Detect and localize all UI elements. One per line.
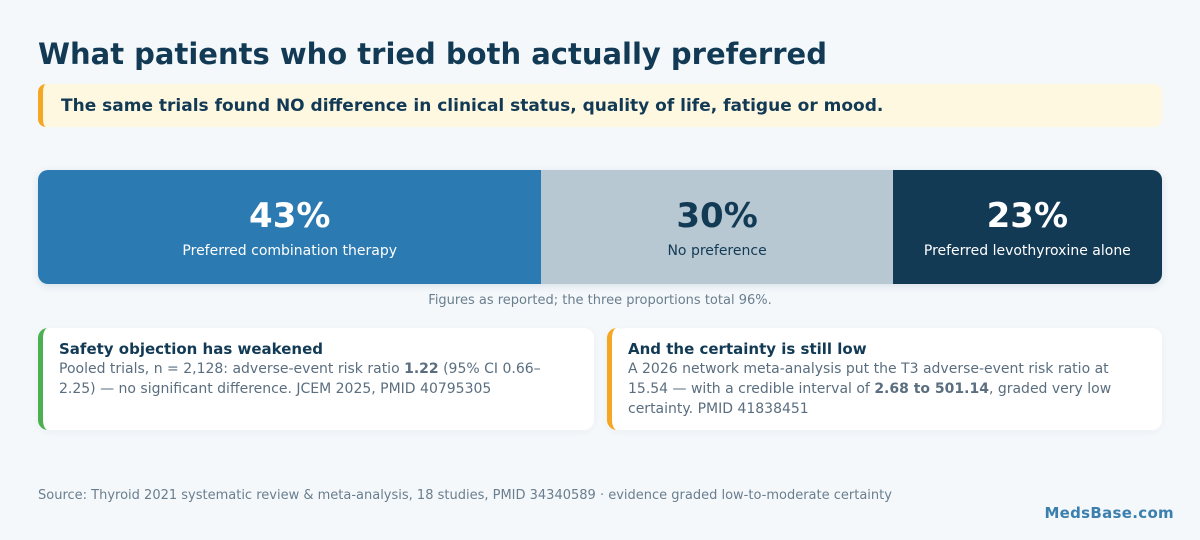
- segment: no preference 30%: No preference: [667, 243, 767, 259]
- segment: levothyroxine alone 23%: Preferred levothyroxine alone: [924, 243, 1131, 259]
- brand mark: MedsBase.com: [1044, 504, 1174, 522]
- panel: safety objection: [38, 328, 594, 430]
- source line: Source: Thyroid 2021 systematic review & meta-analysis, 18 studies, PMID 34340589 · evidence graded low-to-moderate certainty: [38, 488, 892, 503]
- panel text: Pooled trials, n = 2,128: adverse-event risk ratio 1.22 (95% CI 0.66–: [59, 361, 541, 377]
- segment: levothyroxine alone 23%: [893, 170, 1162, 284]
- bar footnote: Figures as reported; the three proportions total 96%.: [428, 293, 772, 308]
- panel text: certainty. PMID 41838451: [628, 401, 809, 417]
- panel text: [59, 361, 541, 397]
- panel text: [628, 361, 1111, 417]
- stacked preference bar: [38, 170, 1162, 284]
- segment: levothyroxine alone 23%: 23%: [987, 196, 1068, 236]
- panel text: 2.25) — no significant difference. JCEM 2025, PMID 40795305: [59, 381, 491, 397]
- title: What patients who tried both actually preferred: [38, 37, 827, 71]
- segment: combination therapy 43%: Preferred combination therapy: [182, 243, 397, 259]
- segment: no preference 30%: 30%: [676, 196, 758, 236]
- segment: combination therapy 43%: 43%: [249, 196, 330, 236]
- segment: combination therapy 43%: [38, 170, 541, 284]
- panel text: 15.54 — with a credible interval of 2.68 to 501.14, graded very low: [628, 381, 1111, 397]
- callout: no difference: [38, 84, 1162, 127]
- panel heading: Safety objection has weakened: [59, 340, 323, 358]
- segment: no preference 30%: [541, 170, 893, 284]
- callout text: The same trials found NO difference in clinical status, quality of life, fatigue or mood.: [61, 96, 883, 116]
- panel heading: And the certainty is still low: [628, 340, 867, 358]
- panel: low certainty: [607, 328, 1162, 430]
- panel text: A 2026 network meta-analysis put the T3 adverse-event risk ratio at: [628, 361, 1109, 377]
